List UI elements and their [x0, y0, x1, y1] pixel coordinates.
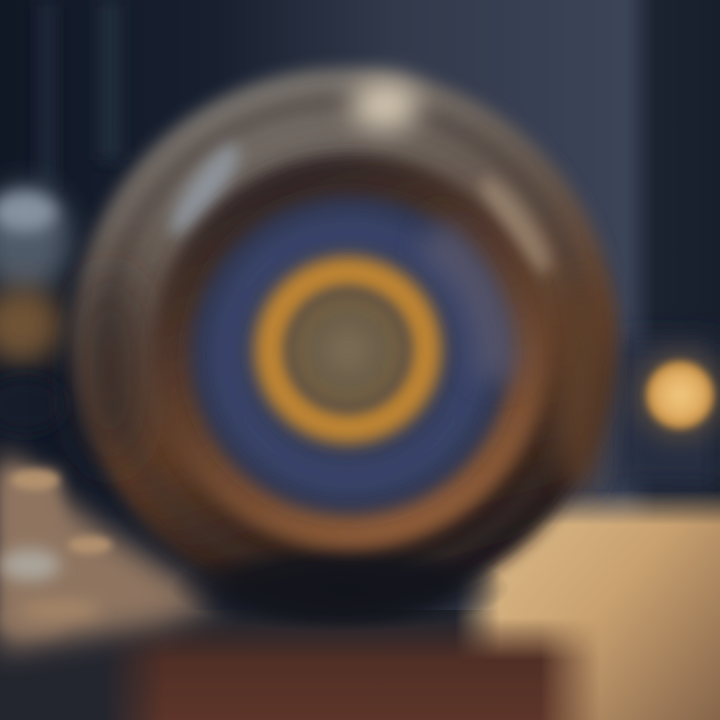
- floor base, dark: [0, 610, 720, 720]
- golden orb at right: [636, 351, 720, 439]
- main disc: [73, 68, 617, 632]
- disc outer rim: [73, 68, 617, 632]
- disc gold ring: [270, 272, 426, 428]
- disc blue ring: [190, 195, 510, 515]
- table surface: light wood at right: [450, 485, 720, 720]
- disc centre: [290, 292, 406, 408]
- left pile of coins: [0, 185, 220, 650]
- disc inner bronze ring: [152, 154, 548, 550]
- foreground table: dark brown: [105, 615, 600, 720]
